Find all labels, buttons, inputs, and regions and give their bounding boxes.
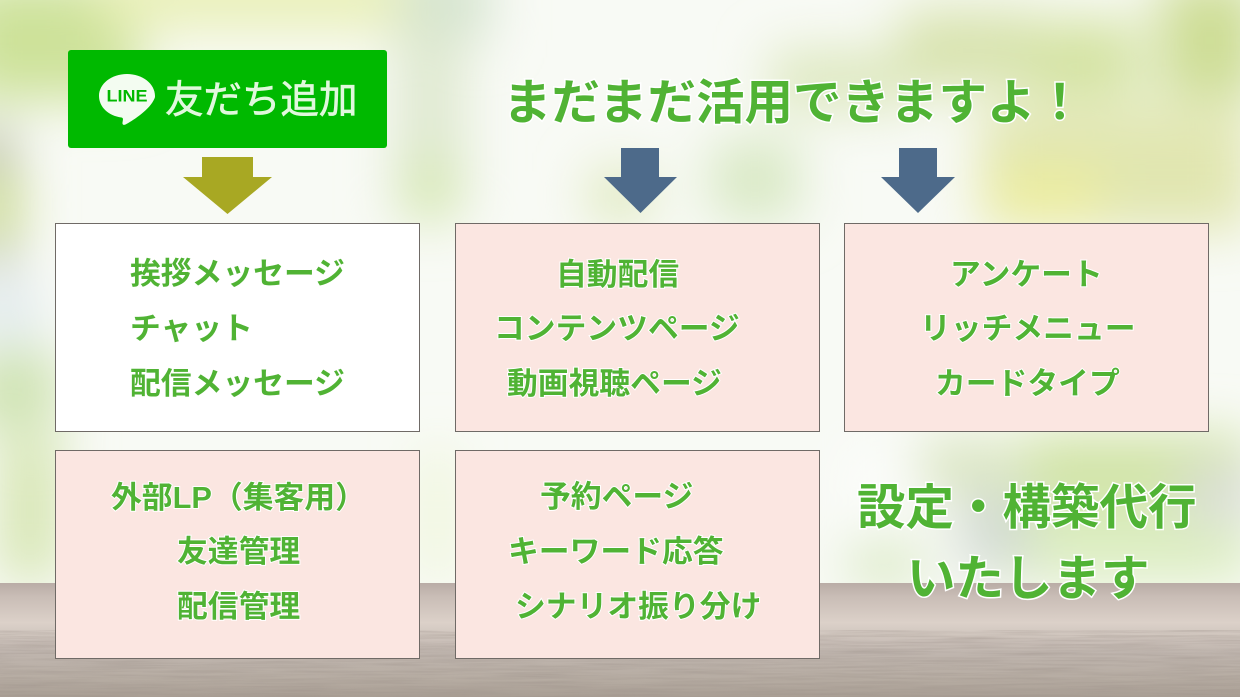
- panel: reservation page: キーワード応答: [508, 534, 724, 569]
- panel: auto delivery: [455, 223, 820, 432]
- heading: still more uses: まだまだ活用できますよ！: [503, 76, 1084, 130]
- arrow: blue down centre: [604, 148, 677, 213]
- icon: LINE speech bubble: [99, 74, 155, 125]
- arrow: olive down: [183, 157, 272, 214]
- button label: 友だち追加: [165, 79, 358, 122]
- panel: survey and rich menu: リッチメニュー: [920, 311, 1136, 346]
- panel text: 挨拶メッセージ: [130, 256, 345, 291]
- panel: reservation page: シナリオ振り分け: [515, 589, 761, 624]
- panel text: 自動配信: [556, 257, 679, 292]
- LINE add friend button: [68, 50, 387, 148]
- callout: setup service: [857, 480, 1197, 606]
- icon: LINE speech bubble: LINE: [106, 88, 148, 106]
- panel: survey and rich menu: [844, 223, 1209, 432]
- arrow: blue down right: [881, 148, 955, 213]
- panel: greeting and chat: チャット: [130, 311, 253, 346]
- panel text: 予約ページ: [540, 479, 693, 514]
- panel: auto delivery: コンテンツページ: [494, 311, 740, 346]
- panel: reservation page: [455, 450, 820, 659]
- panel: external LP: [55, 450, 420, 659]
- panel: external LP: 友達管理: [177, 534, 300, 569]
- panel text: アンケート: [950, 257, 1103, 292]
- panel: survey and rich menu: カードタイプ: [935, 366, 1120, 401]
- panel text: 外部LP（集客用）: [111, 480, 366, 515]
- callout line 2: いたします: [907, 552, 1150, 606]
- panel: greeting and chat: [55, 223, 420, 432]
- panel: external LP: 配信管理: [177, 589, 300, 624]
- callout line 1: 設定・構築代行: [857, 481, 1197, 535]
- panel: greeting and chat: 配信メッセージ: [130, 366, 345, 401]
- panel: auto delivery: 動画視聴ページ: [507, 366, 722, 401]
